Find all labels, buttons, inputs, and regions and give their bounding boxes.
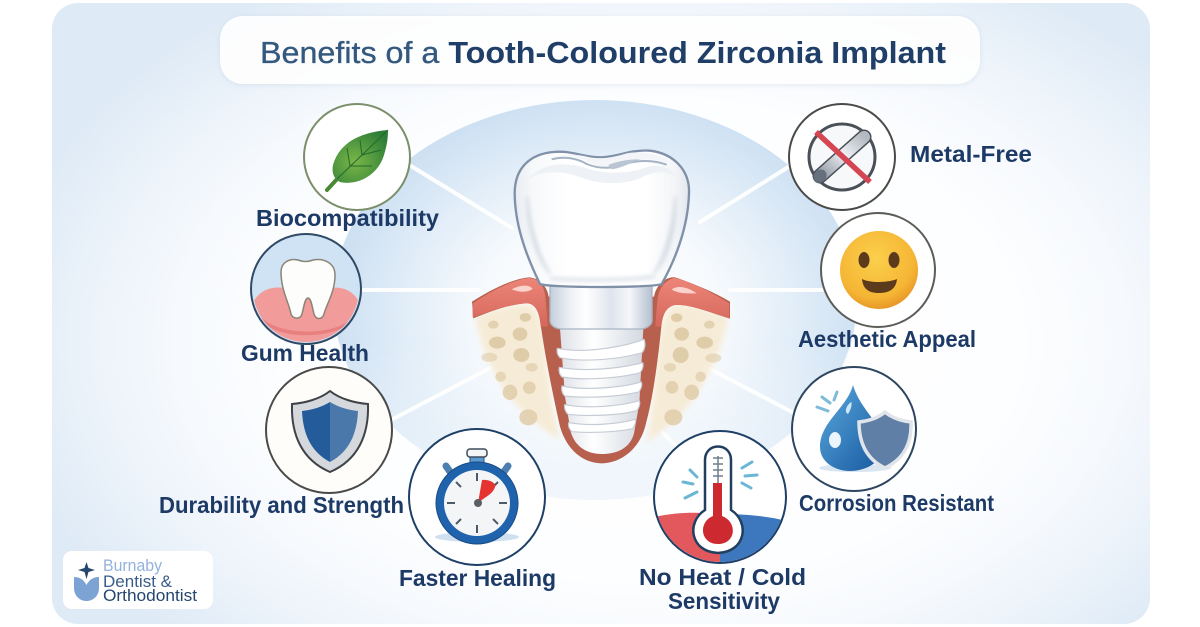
gum socket bbox=[472, 277, 730, 463]
icon: shield bbox=[266, 367, 392, 493]
bone pores bbox=[481, 313, 721, 425]
abutment collar bbox=[550, 286, 652, 329]
label bbox=[639, 564, 806, 614]
benefit: no heat / cold sensitivity bbox=[639, 431, 806, 614]
benefit: durability and strength bbox=[159, 367, 404, 518]
screw body bbox=[560, 328, 643, 454]
crown bbox=[515, 151, 689, 287]
crown shading bbox=[527, 197, 676, 280]
logo text: Orthodontist bbox=[103, 587, 197, 605]
icon: leaf bbox=[304, 104, 410, 210]
crown cusps bbox=[552, 152, 670, 167]
icon: stopwatch bbox=[409, 429, 545, 565]
label: Gum Health bbox=[241, 340, 369, 366]
bone bbox=[475, 304, 728, 443]
logo text bbox=[103, 557, 197, 605]
logo badge bbox=[63, 551, 213, 609]
icon: tulip and star bbox=[74, 562, 99, 601]
label: Sensitivity bbox=[668, 588, 780, 614]
title pill bbox=[220, 16, 980, 84]
icon: tooth in gum bbox=[250, 234, 362, 345]
screw threads bbox=[557, 339, 645, 432]
connector rays bbox=[361, 166, 822, 464]
gum highlights bbox=[473, 278, 548, 327]
icon: smiley bbox=[821, 213, 935, 327]
benefit: corrosion resistant bbox=[792, 367, 994, 516]
title: Benefits of a Tooth-Coloured Zirconia Implant bbox=[260, 35, 946, 70]
label: Corrosion Resistant bbox=[799, 490, 994, 516]
benefit: biocompatibility bbox=[256, 104, 439, 231]
label: Durability and Strength bbox=[159, 492, 404, 518]
label: Faster Healing bbox=[399, 565, 556, 591]
icon: crossed-out metal bar bbox=[789, 104, 895, 210]
logo text: Dentist & bbox=[103, 573, 172, 591]
logo text: Burnaby bbox=[103, 557, 163, 575]
benefit: metal-free bbox=[789, 104, 1032, 210]
benefit: gum health bbox=[241, 234, 369, 366]
central halo circle bbox=[333, 100, 857, 500]
icon: thermometer bbox=[650, 431, 790, 570]
central illustration: zirconia implant bbox=[472, 151, 730, 463]
label: No Heat / Cold bbox=[639, 564, 806, 590]
benefit: aesthetic appeal bbox=[798, 213, 976, 352]
benefit: faster healing bbox=[399, 429, 556, 591]
label: Metal-Free bbox=[910, 141, 1032, 167]
label: Aesthetic Appeal bbox=[798, 326, 976, 352]
icon: water drop and shield bbox=[792, 367, 916, 491]
label: Biocompatibility bbox=[256, 205, 439, 231]
